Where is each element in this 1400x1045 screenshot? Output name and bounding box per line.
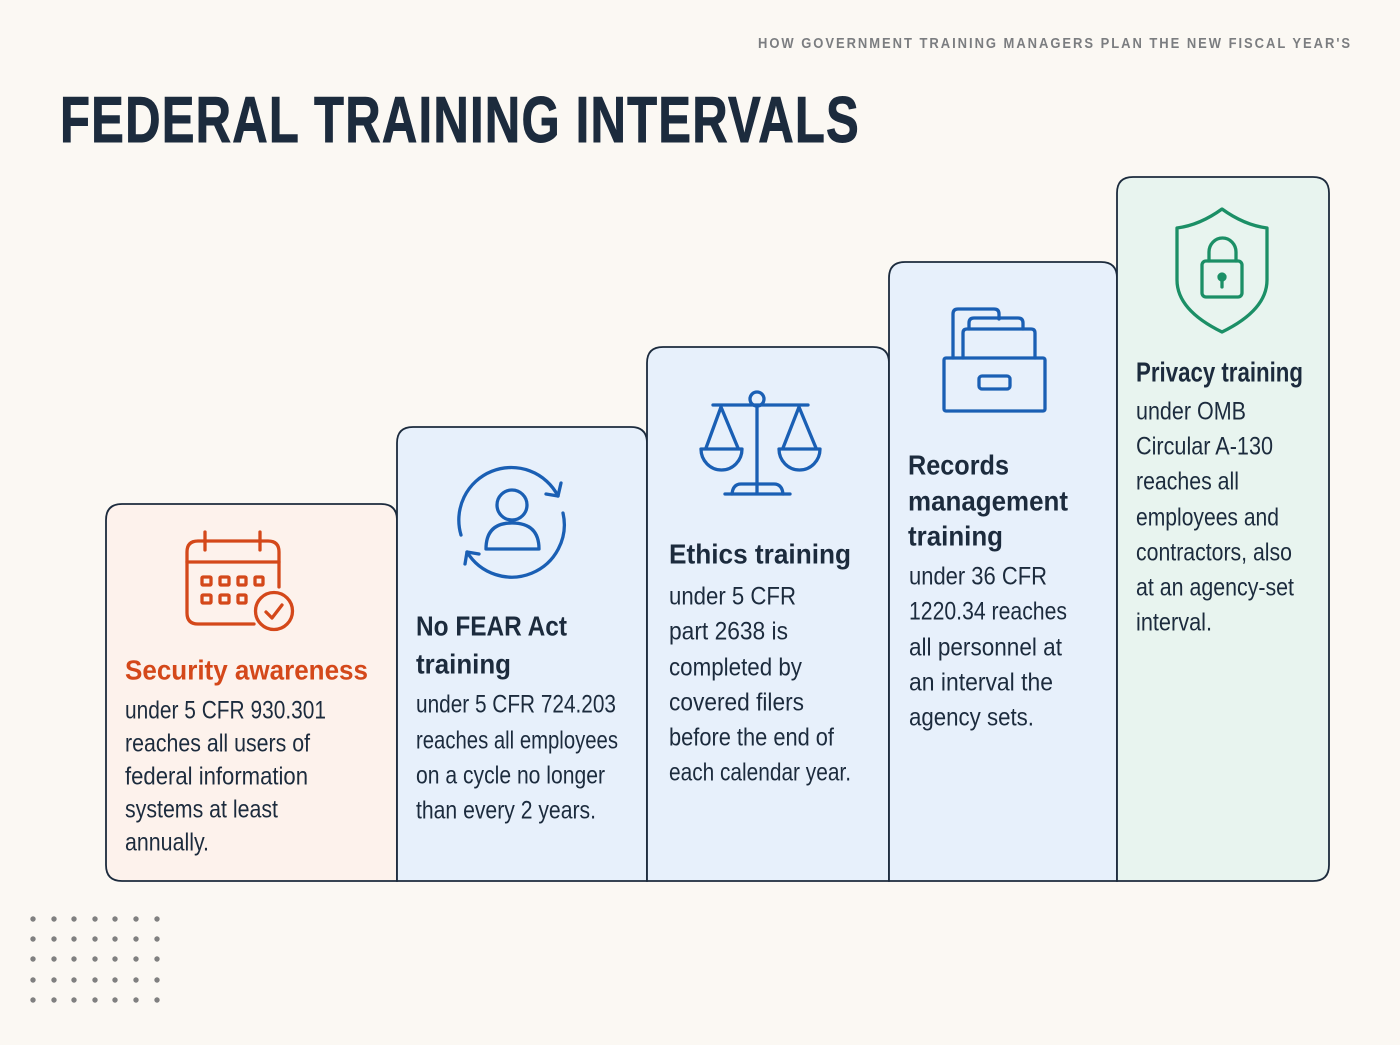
body: records management: all personnel at [909,633,1062,661]
body: security awareness [125,696,326,856]
body: security awareness: federal information [125,762,308,790]
body: records management [909,562,1067,731]
body: privacy training: at an agency-set [1136,573,1294,601]
body: no fear act [416,690,618,824]
heading: ethics training: Ethics training [669,538,851,569]
heading: no fear act: No FEAR Act [416,610,567,641]
body: ethics training: under 5 CFR [669,582,796,610]
body: ethics training: part 2638 is [669,617,788,645]
body: privacy training: under OMB [1136,397,1246,425]
body: security awareness: reaches all users of [125,729,310,757]
body: records management: an interval the [909,668,1053,696]
icon: balance scales [701,392,820,494]
icon: person with cycle arrows [459,468,564,577]
body: ethics training: before the end of [669,723,834,751]
icon: calendar with check [187,532,292,630]
body: ethics training: each calendar year. [669,758,851,786]
body: security awareness: under 5 CFR 930.301 [125,696,326,724]
heading: records management: training [908,520,1003,551]
title: FEDERAL TRAINING INTERVALS [60,83,860,156]
body: privacy training: interval. [1136,608,1212,636]
heading: records management: management [908,485,1068,516]
panel: privacy training [1117,177,1329,881]
body: privacy training: contractors, also [1136,538,1292,566]
icon: shield with padlock [1177,209,1267,332]
body: privacy training: reaches all [1136,467,1239,495]
heading: records management [908,449,1068,551]
heading: no fear act [416,610,567,679]
body: no fear act: reaches all employees [416,726,618,754]
heading: records management: Records [908,449,1009,480]
body: privacy training [1136,397,1294,636]
panel: ethics training [647,347,889,881]
body: privacy training: employees and [1136,503,1279,531]
heading: security awareness: Security awareness [125,654,368,685]
body: security awareness: systems at least [125,795,278,823]
body: ethics training: covered filers [669,688,804,716]
body: no fear act: than every 2 years. [416,796,596,824]
body: no fear act: on a cycle no longer [416,761,605,789]
body: records management: 1220.34 reaches [909,597,1067,625]
body: privacy training: Circular A-130 [1136,432,1273,460]
body: ethics training: completed by [669,653,802,681]
body: security awareness: annually. [125,828,209,856]
panel: no fear act [397,427,647,881]
body: ethics training [669,582,851,786]
body: records management: under 36 CFR [909,562,1047,590]
heading: no fear act: training [416,648,511,679]
heading: privacy training: Privacy training [1136,356,1303,387]
body: records management: agency sets. [909,703,1034,731]
panel: records management [889,262,1117,881]
body: no fear act: under 5 CFR 724.203 [416,690,616,718]
icon: file drawer [944,309,1045,411]
panel: security awareness [106,504,397,881]
